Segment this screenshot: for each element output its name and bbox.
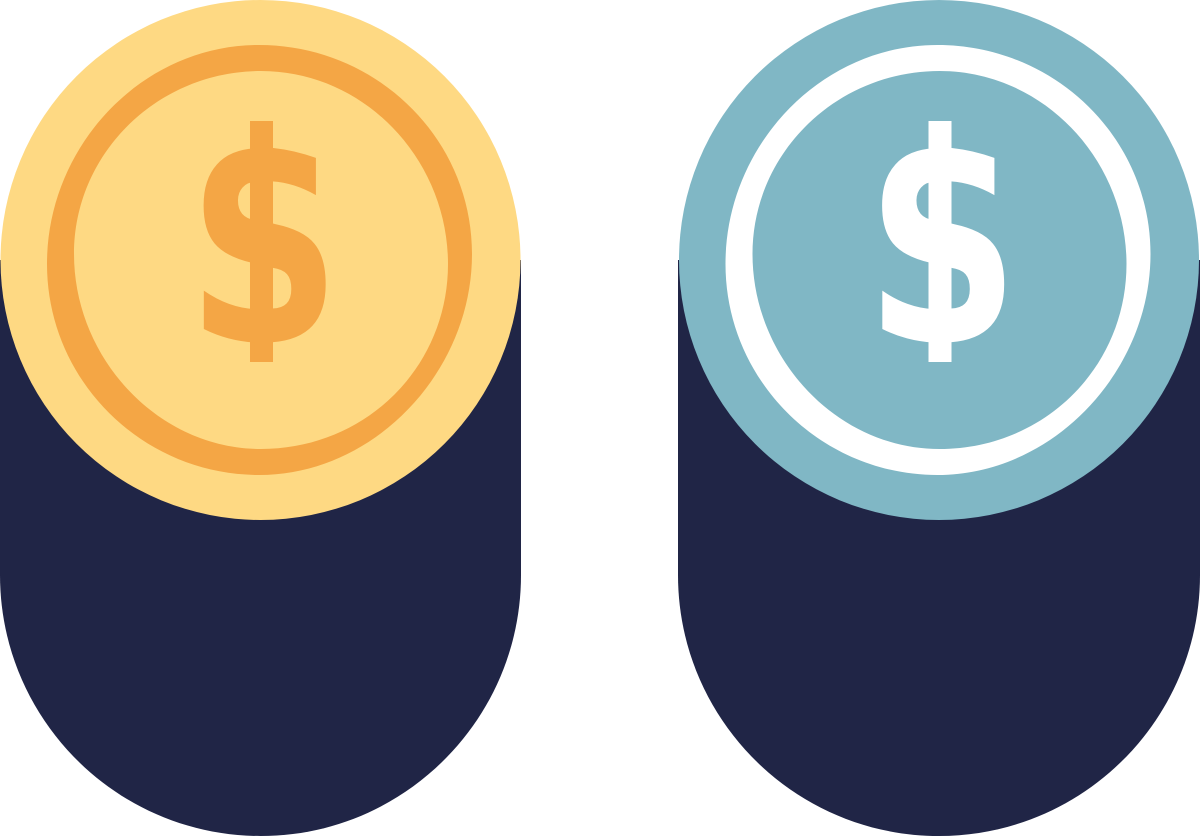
navy pillar, right — [678, 260, 1200, 836]
blue coin ring — [726, 45, 1150, 475]
blue coin dollar sign — [882, 121, 1004, 362]
blue coin dollar sign: $ — [865, 65, 1019, 414]
gold coin dollar sign — [204, 121, 326, 362]
icon: gold coin on navy pillar — [0, 0, 521, 836]
gold coin disc — [0, 0, 520, 520]
gold coin dollar sign: $ — [186, 65, 341, 414]
icon: blue coin on navy pillar — [678, 0, 1200, 836]
navy pillar, left — [0, 260, 521, 836]
gold coin ring — [47, 45, 472, 475]
blue coin disc — [679, 0, 1199, 520]
